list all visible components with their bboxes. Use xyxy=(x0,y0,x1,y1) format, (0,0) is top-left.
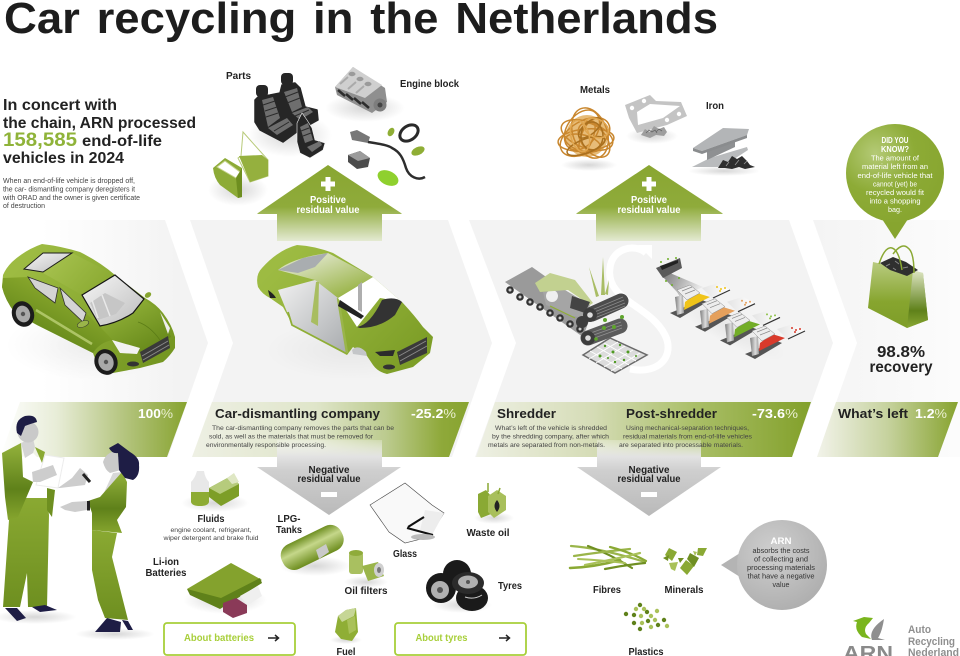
rollers xyxy=(592,301,621,314)
callout: did you know: end-of-life vehicle that xyxy=(858,171,933,180)
intro heading: vehicles in 2024 xyxy=(3,150,124,167)
windshield opening xyxy=(338,277,402,327)
label: engine block: Engine block xyxy=(400,79,459,90)
icon: fluids xyxy=(181,471,249,512)
callout: did you know: The amount of xyxy=(871,154,920,162)
man xyxy=(0,416,77,624)
roof xyxy=(43,253,115,295)
label: waste oil: Waste oil xyxy=(466,528,510,539)
logo: ARN Auto Recycling Nederland: Auto xyxy=(908,624,931,636)
logo: ARN Auto Recycling Nederland: Recycling xyxy=(908,636,955,648)
rear window xyxy=(24,253,72,272)
icon: LPG tank xyxy=(277,521,351,576)
label: oil filters: Oil filters xyxy=(344,586,388,597)
headlight and grille xyxy=(112,340,140,354)
sieve xyxy=(583,338,647,373)
text: post-shredder description: residual materials from end-of-life vehicles xyxy=(623,434,753,440)
text: post-shredder description: are separated into processable materials. xyxy=(619,442,743,449)
icon: li-ion battery xyxy=(183,563,267,618)
intro heading: the chain, ARN processed xyxy=(3,115,196,132)
bar: 100%: 100% xyxy=(138,406,173,421)
bar: shredder and post-shredder xyxy=(476,402,811,457)
intro heading: 158,585 xyxy=(3,130,77,151)
intro heading: end-of-life xyxy=(82,133,162,150)
label: LPG tanks xyxy=(276,514,302,536)
positive residual value arrow 1: residual value xyxy=(296,205,360,216)
negative residual value arrow 2 xyxy=(577,440,721,516)
intro text: the car- dismantling company deregisters it xyxy=(3,186,135,194)
icon: copper metals xyxy=(554,103,617,171)
negative residual value arrow 2: residual value xyxy=(618,474,681,485)
callout: did you know: bag. xyxy=(888,205,902,214)
recovery figure: 98.8% xyxy=(877,344,925,361)
station: yellow xyxy=(670,283,730,318)
intro text: with ORAD and the owner is given certificate xyxy=(2,195,140,202)
logo: ARN Auto Recycling Nederland xyxy=(843,617,959,656)
label: iron: Iron xyxy=(706,101,724,112)
label: metals: Metals xyxy=(580,85,610,96)
conveyor xyxy=(505,267,593,337)
intro heading xyxy=(3,97,196,167)
label: fibres: Fibres xyxy=(593,585,621,596)
intro text: When an end-of-life vehicle is dropped off, xyxy=(3,178,135,185)
intro heading: In concert with xyxy=(3,97,117,114)
label: fluids xyxy=(162,514,259,542)
callout: did you know: DID YOU xyxy=(882,136,909,145)
front seat xyxy=(297,113,325,158)
text: car-dismantling description: The car-dismantling company removes the parts that can be xyxy=(212,425,394,432)
negative residual value arrow 1: Negative xyxy=(308,465,350,476)
bar: what's left xyxy=(817,402,958,457)
callout: did you know xyxy=(846,124,944,239)
callout: did you know: KNOW? xyxy=(881,145,909,154)
label: parts: Parts xyxy=(226,71,251,82)
callout: did you know: into a shopping xyxy=(870,196,920,206)
bar: shredder and post-shredder: -73.6 % xyxy=(752,406,798,421)
roof xyxy=(278,253,373,298)
negative residual value arrow 1: residual value xyxy=(298,474,361,485)
icon: tyres xyxy=(426,560,492,613)
callout: ARN absorbs costs: that have a negative xyxy=(748,572,814,580)
button: about batteries xyxy=(164,623,295,655)
icon: oil filters xyxy=(344,550,388,588)
text: shredder description: What’s left of the vehicle is shredded xyxy=(495,425,607,432)
station: green xyxy=(720,310,780,345)
callout: ARN absorbs costs: absorbs the costs xyxy=(752,546,810,555)
label: minerals: Minerals xyxy=(664,585,704,596)
bar: what's left: 1.2% xyxy=(915,406,947,421)
icon: plastics xyxy=(624,603,669,631)
text: shredder description xyxy=(488,425,609,449)
callout: ARN absorbs costs: processing materials xyxy=(747,563,815,572)
positive residual value arrow 2: residual value xyxy=(618,205,681,216)
button: about tyres: About tyres xyxy=(416,633,468,644)
callout: did you know: cannot (yet) be xyxy=(873,180,917,188)
intro text: of destruction xyxy=(3,203,45,210)
button: about batteries: About batteries xyxy=(184,633,254,644)
button: about tyres xyxy=(395,623,526,655)
text: car-dismantling description: environmentally responsible processing. xyxy=(206,442,326,449)
callout: ARN absorbs costs xyxy=(721,520,827,610)
side panel xyxy=(2,277,113,353)
icon: shredder machine xyxy=(505,257,647,373)
windshield xyxy=(82,275,144,326)
spikes xyxy=(589,257,609,297)
station: red xyxy=(745,324,805,359)
text: post-shredder description xyxy=(619,425,753,449)
bar: car-dismantling company: -25.2% xyxy=(411,406,456,421)
label: li-ion batteries: Li-ion xyxy=(153,557,179,568)
icon: minerals xyxy=(663,548,707,575)
body xyxy=(2,244,175,373)
rear bench xyxy=(255,83,318,142)
recovery figure: recovery xyxy=(870,359,933,376)
background chevrons xyxy=(0,220,960,457)
mirrors xyxy=(76,319,90,329)
icon: engine block xyxy=(325,67,405,122)
icon: doors xyxy=(208,132,268,206)
icon: shopping bag xyxy=(868,246,928,328)
grille and lamps xyxy=(397,337,427,365)
icon: post-shredder stations xyxy=(656,257,805,371)
icon: metal plate with scrap xyxy=(625,95,687,144)
label: LPG tanks: Tanks xyxy=(276,525,302,536)
label: li-ion batteries: Batteries xyxy=(146,568,187,579)
bar: shredder and post-shredder: Shredder xyxy=(497,406,556,421)
icon: glass windscreen xyxy=(370,483,444,543)
bar: car-dismantling company xyxy=(192,402,469,457)
positive residual value arrow 2: Positive xyxy=(631,195,667,206)
icon: fuel can xyxy=(330,608,362,644)
icon: fibres xyxy=(570,546,646,569)
positive residual value arrow 1 xyxy=(257,165,402,241)
bar: car-dismantling company: Car-dismantling company xyxy=(215,406,381,421)
text: post-shredder description: Using mechanical-separation techniques, xyxy=(626,425,749,432)
callout: ARN absorbs costs: of collecting and xyxy=(754,554,808,564)
label: fluids: engine coolant, refrigerant, xyxy=(170,527,252,534)
negative residual value arrow 2: Negative xyxy=(628,465,670,476)
icon: car seats xyxy=(248,73,332,158)
label: LPG tanks: LPG- xyxy=(278,514,300,525)
icon: waste oil xyxy=(474,483,514,524)
bar: 100% xyxy=(0,402,187,457)
icon: green car xyxy=(2,244,175,380)
bar: shredder and post-shredder: Post-shredder xyxy=(626,406,717,421)
positive residual value arrow 1: Positive xyxy=(310,195,346,206)
text: shredder description: by the shredding company, after which xyxy=(492,434,609,440)
wrecked car xyxy=(543,290,590,318)
label: li-ion batteries xyxy=(146,557,187,579)
wheels xyxy=(8,298,121,378)
illustration: man and woman exchanging keys xyxy=(0,416,155,640)
callout: did you know: recycled would fit xyxy=(866,188,925,197)
icon: dismantled car xyxy=(257,245,435,380)
hood xyxy=(100,299,171,353)
icon: iron beam with gravel xyxy=(688,128,760,176)
arrow: S-shaped white flow xyxy=(610,245,668,370)
callout: did you know: material left from an xyxy=(862,162,928,171)
station: orange xyxy=(695,297,755,332)
text: car-dismantling description: sold, as well as the materials that must be removed for xyxy=(209,434,374,440)
text: car-dismantling description xyxy=(206,425,394,449)
intro text xyxy=(2,178,140,210)
bar: what's left: What’s left xyxy=(838,406,909,421)
woman xyxy=(58,443,155,640)
recovery figure xyxy=(870,344,933,376)
positive residual value arrow 2 xyxy=(576,165,723,241)
label: fluids: wiper detergent and brake fluid xyxy=(162,535,259,542)
label: tyres: Tyres xyxy=(498,581,522,592)
negative residual value arrow 1 xyxy=(257,440,401,515)
label: glass: Glass xyxy=(393,549,417,560)
door opening xyxy=(278,280,347,353)
text: shredder description: metals are separated from non-metals. xyxy=(488,442,605,449)
callout: ARN absorbs costs: value xyxy=(772,580,790,589)
label: fluids: Fluids xyxy=(198,514,225,525)
icon: small car parts xyxy=(348,122,426,189)
callout: ARN absorbs costs: ARN xyxy=(770,536,792,546)
side windows xyxy=(28,277,58,303)
